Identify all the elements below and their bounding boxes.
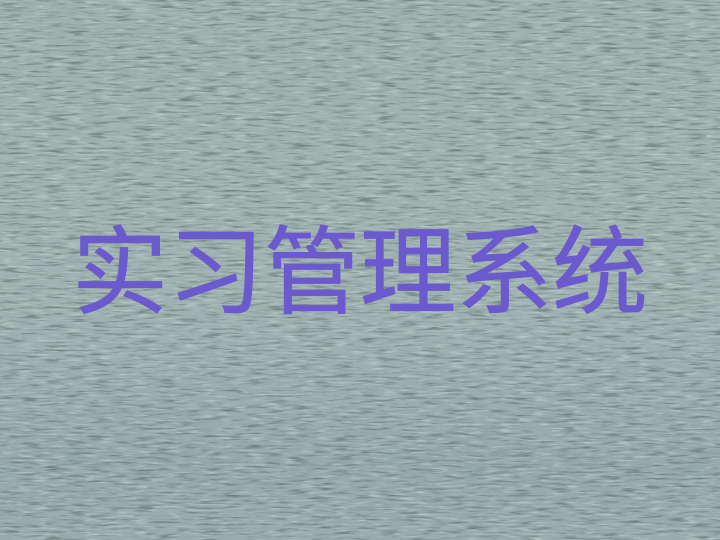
title: 实习管理系统 — [72, 220, 648, 327]
